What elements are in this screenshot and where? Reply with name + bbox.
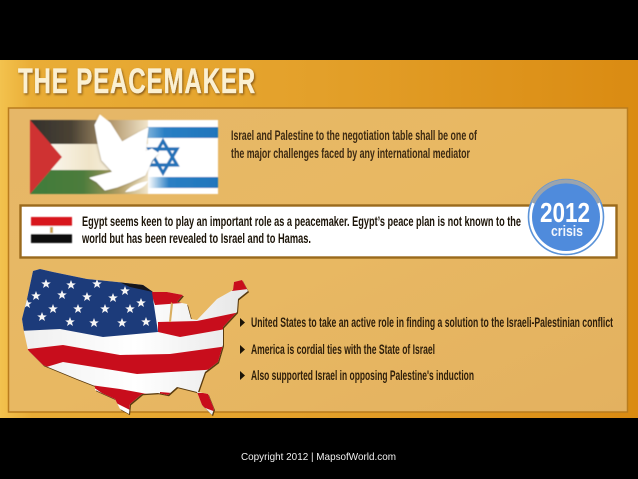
bullet: opposing induction: Also supported Israel in opposing Palestine's induction	[251, 367, 474, 383]
title: THE PEACEMAKER	[18, 62, 256, 101]
badge: 2012 crisis: 2012	[540, 197, 590, 228]
list: United States points	[240, 314, 613, 383]
panel: main content	[8, 108, 628, 412]
text block: negotiation table	[231, 128, 477, 161]
badge: 2012 crisis	[528, 179, 604, 255]
badge: 2012 crisis: crisis	[551, 223, 583, 240]
map: blue canton with stars	[22, 269, 158, 337]
background: gold slide band	[0, 60, 638, 418]
bullet: cordial ties: America is cordial ties with the State of Israel	[251, 341, 435, 357]
text block: negotiation table: Israel and Palestine to the negotiation table shall be one of	[231, 128, 477, 143]
map: red stripes	[20, 279, 248, 412]
bullet: cordial ties	[240, 341, 435, 357]
footer: copyright: Copyright 2012 | MapsofWorld.com	[241, 451, 396, 463]
map: United States flag map	[22, 269, 249, 416]
panel: Egypt callout	[20, 206, 616, 258]
icon: Egypt flag	[31, 217, 72, 243]
bullet: opposing induction	[240, 367, 474, 383]
text block: negotiation table: the major challenges faced by any international mediator	[231, 146, 470, 161]
text block: Egypt peace plan: world but has been revealed to Israel and to Hamas.	[81, 230, 311, 246]
text block: Egypt peace plan	[81, 213, 521, 246]
map: Lake Michigan notch	[169, 302, 173, 322]
icon: Palestine and Israel flags with dove	[30, 115, 218, 194]
